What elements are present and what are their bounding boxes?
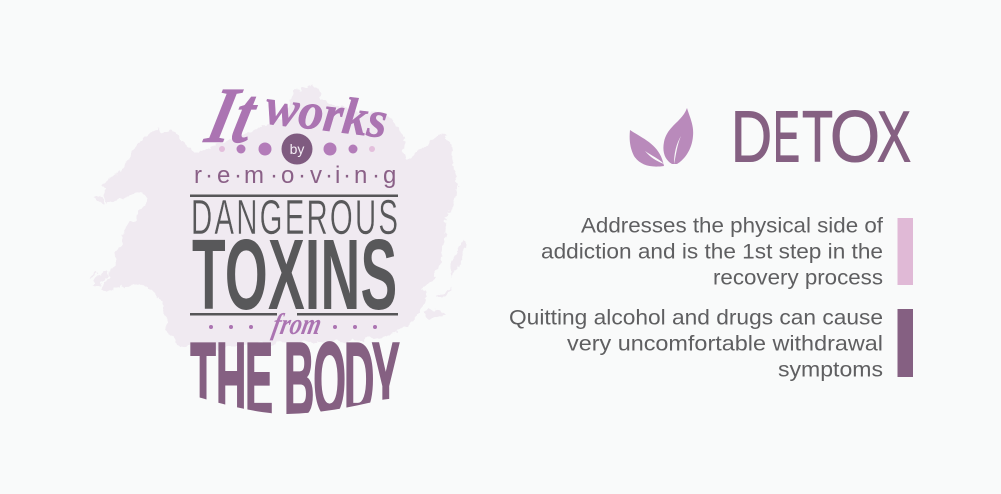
heading: DETOX: O: [830, 98, 880, 178]
heading: DETOX: X: [877, 98, 911, 178]
script: It works: [198, 71, 391, 160]
text block: withdrawal: [509, 306, 883, 382]
from with dots: [209, 307, 377, 341]
script: It works: works: [263, 78, 391, 150]
heading: DETOX: E: [773, 98, 800, 178]
dots row with by badge: [219, 134, 375, 164]
text block: physical side: [541, 214, 883, 290]
heading: DETOX: T: [802, 98, 833, 178]
removing: r·e·m·o·v·i·n·g: [194, 162, 396, 189]
TOXINS: TOXINS: [192, 220, 397, 331]
text block: physical side: recovery process: [713, 266, 883, 290]
text block: withdrawal: symptoms: [778, 358, 883, 382]
headline lettering: [190, 89, 400, 414]
bar: dark: [898, 309, 913, 377]
script: It works: It: [198, 71, 267, 160]
rule split: [190, 313, 398, 316]
text block: physical side: Addresses the physical side of: [581, 214, 883, 238]
text block: withdrawal: very uncomfortable withdrawal: [567, 332, 883, 356]
rule: [190, 194, 398, 197]
dots row with by badge: by: [290, 141, 304, 157]
heading: DETOX: [731, 98, 911, 178]
heading: DETOX: D: [731, 98, 772, 178]
text block: withdrawal: Quitting alcohol and drugs can cause: [509, 306, 883, 330]
bar: light: [898, 218, 913, 285]
brush splash: [90, 83, 467, 352]
from with dots: from: [270, 307, 325, 341]
text block: physical side: addiction and is the 1st step in the: [541, 240, 883, 264]
THE BODY: THE BODY: [190, 321, 400, 438]
DANGEROUS: DANGEROUS: [191, 189, 398, 245]
icon: leaves: [630, 108, 693, 167]
